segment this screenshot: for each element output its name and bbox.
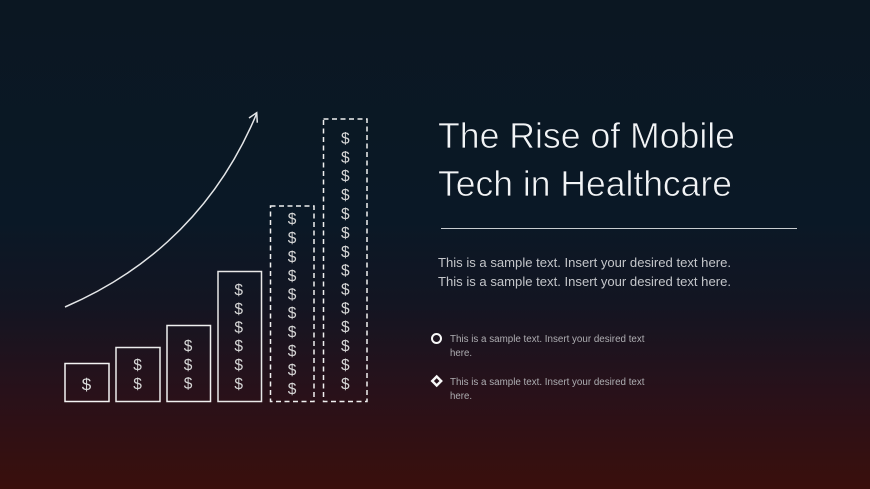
- bar 5 dashed: $: [288, 324, 297, 341]
- title divider: [441, 228, 797, 230]
- growth arrow: [65, 113, 257, 307]
- bar 6 dashed: $: [341, 300, 350, 318]
- body text: This is a sample text. Insert your desired text here.: [438, 274, 731, 289]
- icon: circle bullet: [432, 334, 441, 343]
- bar 6 dashed: [324, 119, 367, 402]
- bar 6 dashed: $: [341, 225, 350, 242]
- bar chart: [65, 119, 367, 402]
- bar 5 dashed: $: [288, 381, 297, 398]
- bar 5 dashed: $: [288, 286, 297, 304]
- bar 6 dashed: $: [341, 150, 350, 166]
- bar 1: $: [82, 375, 92, 394]
- bar 3: $: [184, 338, 193, 355]
- body text: This is a sample text. Insert your desired text here.: [438, 255, 731, 270]
- bullet text 1: This is a sample text. Insert your desired text: [450, 334, 645, 345]
- bullet item 2: [432, 376, 645, 402]
- bar 5 dashed: $: [288, 268, 297, 285]
- bar 4: [218, 272, 262, 402]
- title: [438, 115, 735, 204]
- bar 4: $: [234, 320, 243, 336]
- bar 2: $: [133, 376, 142, 393]
- bar 2: [116, 348, 160, 402]
- bar 5 dashed: $: [288, 230, 297, 247]
- bullet text 2: here.: [450, 391, 472, 402]
- bullet text 1: here.: [450, 348, 472, 359]
- bar 5 dashed: $: [288, 305, 297, 322]
- bar 6 dashed: $: [341, 376, 350, 393]
- bar 5 dashed: $: [288, 343, 297, 360]
- bullet item 1: [432, 334, 645, 359]
- bar 6 dashed: $: [341, 282, 350, 298]
- bar 4: $: [234, 338, 243, 355]
- bar 3: [167, 326, 210, 402]
- bar 5 dashed: [270, 206, 314, 402]
- title: Tech in Healthcare: [438, 163, 732, 204]
- bar 6 dashed: $: [341, 262, 350, 280]
- bar 6 dashed: $: [341, 168, 350, 185]
- bullet text 2: This is a sample text. Insert your desired text: [450, 377, 645, 388]
- bar 4: $: [234, 357, 243, 374]
- bar 3: $: [184, 376, 193, 392]
- bar 1: [65, 364, 109, 402]
- bar 6 dashed: $: [341, 130, 350, 148]
- bar 6 dashed: $: [341, 187, 350, 204]
- bar 5 dashed: $: [288, 211, 297, 228]
- bar 6 dashed: $: [341, 319, 350, 336]
- body text: [438, 255, 731, 289]
- bar 5 dashed: $: [288, 362, 297, 379]
- bar 6 dashed: $: [341, 338, 350, 355]
- bullet text 2: [450, 377, 645, 402]
- bullet text 1: [450, 334, 645, 359]
- bar 4: $: [234, 282, 243, 299]
- bar 6 dashed: $: [341, 244, 350, 261]
- bar 6 dashed: $: [341, 206, 350, 223]
- bar 5 dashed: $: [288, 249, 297, 266]
- bar 4: $: [234, 376, 243, 393]
- bar 4: $: [234, 301, 243, 318]
- bar 3: $: [184, 357, 193, 374]
- title: The Rise of Mobile: [438, 115, 735, 156]
- bar 2: $: [133, 357, 142, 374]
- icon: diamond bullet: [432, 376, 441, 386]
- bar 6 dashed: $: [341, 357, 350, 374]
